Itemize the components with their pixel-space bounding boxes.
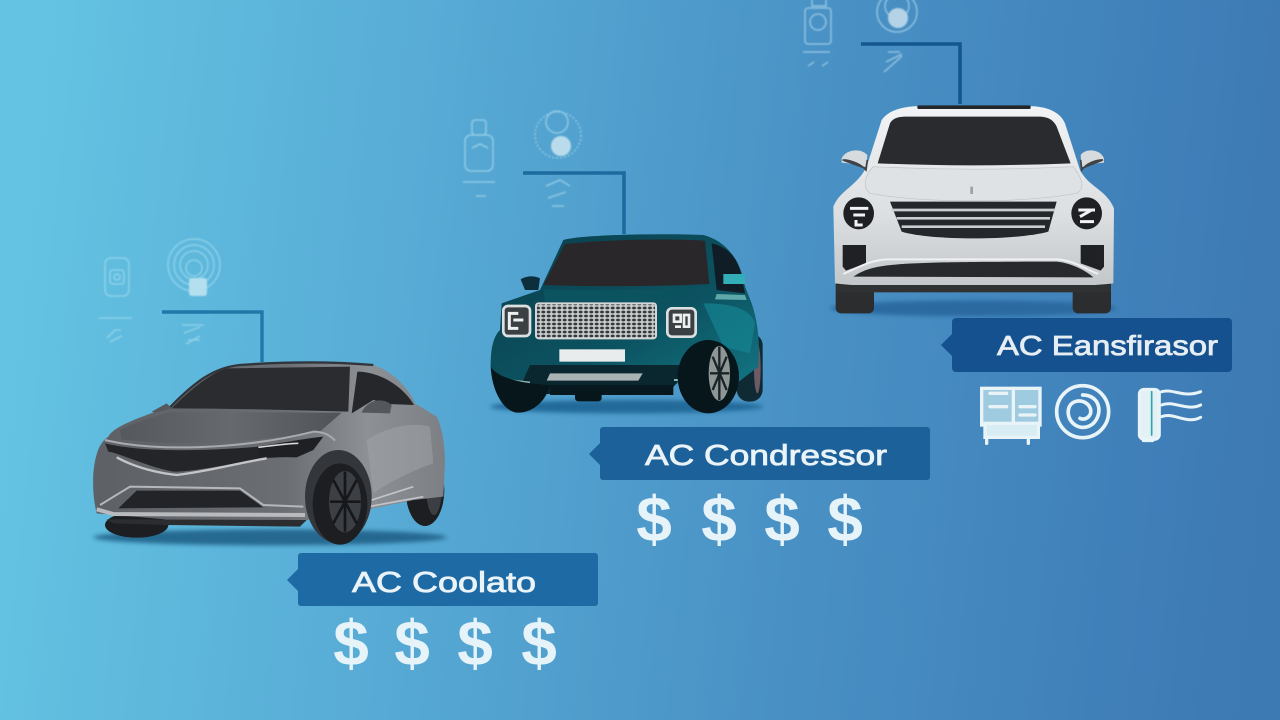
- dollar signs row 2: $: [701, 483, 737, 555]
- car 1 mirror: [362, 400, 392, 413]
- car 2 licence plate: [559, 349, 625, 362]
- label 3 box: [952, 318, 1232, 372]
- car 3 mirrors: [842, 150, 867, 170]
- connector line to car 1: [162, 312, 262, 362]
- car 3 wheels: [836, 280, 874, 313]
- connector line to car 3: [861, 44, 960, 104]
- car 2 front-right wheel: [678, 340, 739, 413]
- car 2 body: [491, 234, 759, 383]
- car 1 lower intake: [118, 491, 263, 508]
- label 2 box: [600, 427, 930, 480]
- car 3 hood: [865, 167, 1082, 201]
- label: AC Eansfirasor: [941, 318, 1232, 372]
- car 2 windshield: [543, 239, 709, 286]
- icon: evaporator with airflow: [1139, 389, 1201, 441]
- dollar signs row 2: $: [636, 483, 672, 555]
- car 1 bumper lip: [97, 509, 305, 515]
- car 3 bottom band: [836, 285, 1111, 292]
- dollar signs row 1: [333, 607, 557, 679]
- label 2 text: AC Condressor: [645, 440, 887, 472]
- car 2 left headlight: [503, 306, 530, 336]
- car 1 roof edge: [170, 362, 373, 407]
- car 1 far wheels: [105, 454, 444, 538]
- car 2 side windows: [712, 243, 745, 293]
- car 3 windshield: [878, 117, 1071, 165]
- car 3 lower intake: [853, 262, 1093, 277]
- label 1 box: [298, 553, 598, 606]
- faint icons above car 3: [803, 0, 917, 72]
- car 1 headlight: [257, 437, 323, 457]
- car 2 hood highlight: [543, 287, 707, 302]
- car 3 shadow: [830, 300, 1117, 316]
- dollar signs row 1: $: [457, 607, 493, 679]
- faint icons above car 2: [463, 111, 581, 206]
- car 1: gray sedan: [93, 362, 447, 545]
- car 2 right headlight: [667, 308, 696, 337]
- car 3 logo: [968, 187, 976, 194]
- car 2 mirror: [521, 276, 540, 290]
- car 2 far wheel: [737, 333, 763, 402]
- car 3 bumper vents: [843, 245, 866, 271]
- faint icons above car 1: [99, 239, 220, 344]
- car 3 left headlight: [843, 197, 874, 229]
- label 2 pointer: [589, 443, 600, 465]
- car 3 grille: [890, 202, 1057, 238]
- car 2 shadow: [490, 400, 763, 413]
- label 3 pointer: [941, 334, 952, 356]
- icon: manual panel: [982, 388, 1040, 443]
- car 2 front-left wheel: [491, 367, 550, 413]
- car 2 bumper bottom: [550, 385, 673, 395]
- label: AC Condressor: [589, 427, 930, 480]
- car 3 body: [833, 106, 1114, 288]
- dollar signs row 2: $: [764, 483, 800, 555]
- dollar signs row 2: [636, 483, 863, 555]
- car 1 grille: [105, 443, 297, 472]
- car 1 side highlights: [367, 425, 433, 493]
- car 2 grille: [536, 303, 656, 338]
- car 3 right headlight: [1071, 197, 1102, 229]
- label 1 pointer: [287, 569, 298, 591]
- car 1 body: [93, 362, 445, 521]
- icon: spiral coil: [1057, 386, 1109, 438]
- car 1 chrome strips: [117, 457, 267, 475]
- dollar signs row 1: $: [521, 607, 557, 679]
- car 1 hood: [120, 412, 342, 443]
- component icons row: [982, 386, 1201, 443]
- car 2: teal SUV: [490, 234, 763, 413]
- car 3 sunroof: [917, 105, 1031, 109]
- connector line to car 2: [523, 173, 624, 234]
- car 1 windshield: [172, 367, 350, 412]
- car 1 front wheel: [305, 450, 372, 543]
- car 1 side window: [352, 372, 414, 413]
- dollar signs row 2: $: [827, 483, 863, 555]
- car 3: white SUV: [830, 105, 1117, 316]
- label 1 text: AC Coolato: [352, 567, 536, 599]
- dollar signs row 1: $: [333, 607, 369, 679]
- label: AC Coolato: [287, 553, 598, 606]
- label 3 text: AC Eansfirasor: [997, 330, 1218, 361]
- car 1 shadow: [93, 529, 447, 545]
- dollar signs row 1: $: [394, 607, 430, 679]
- car 2 lower trim: [523, 365, 683, 394]
